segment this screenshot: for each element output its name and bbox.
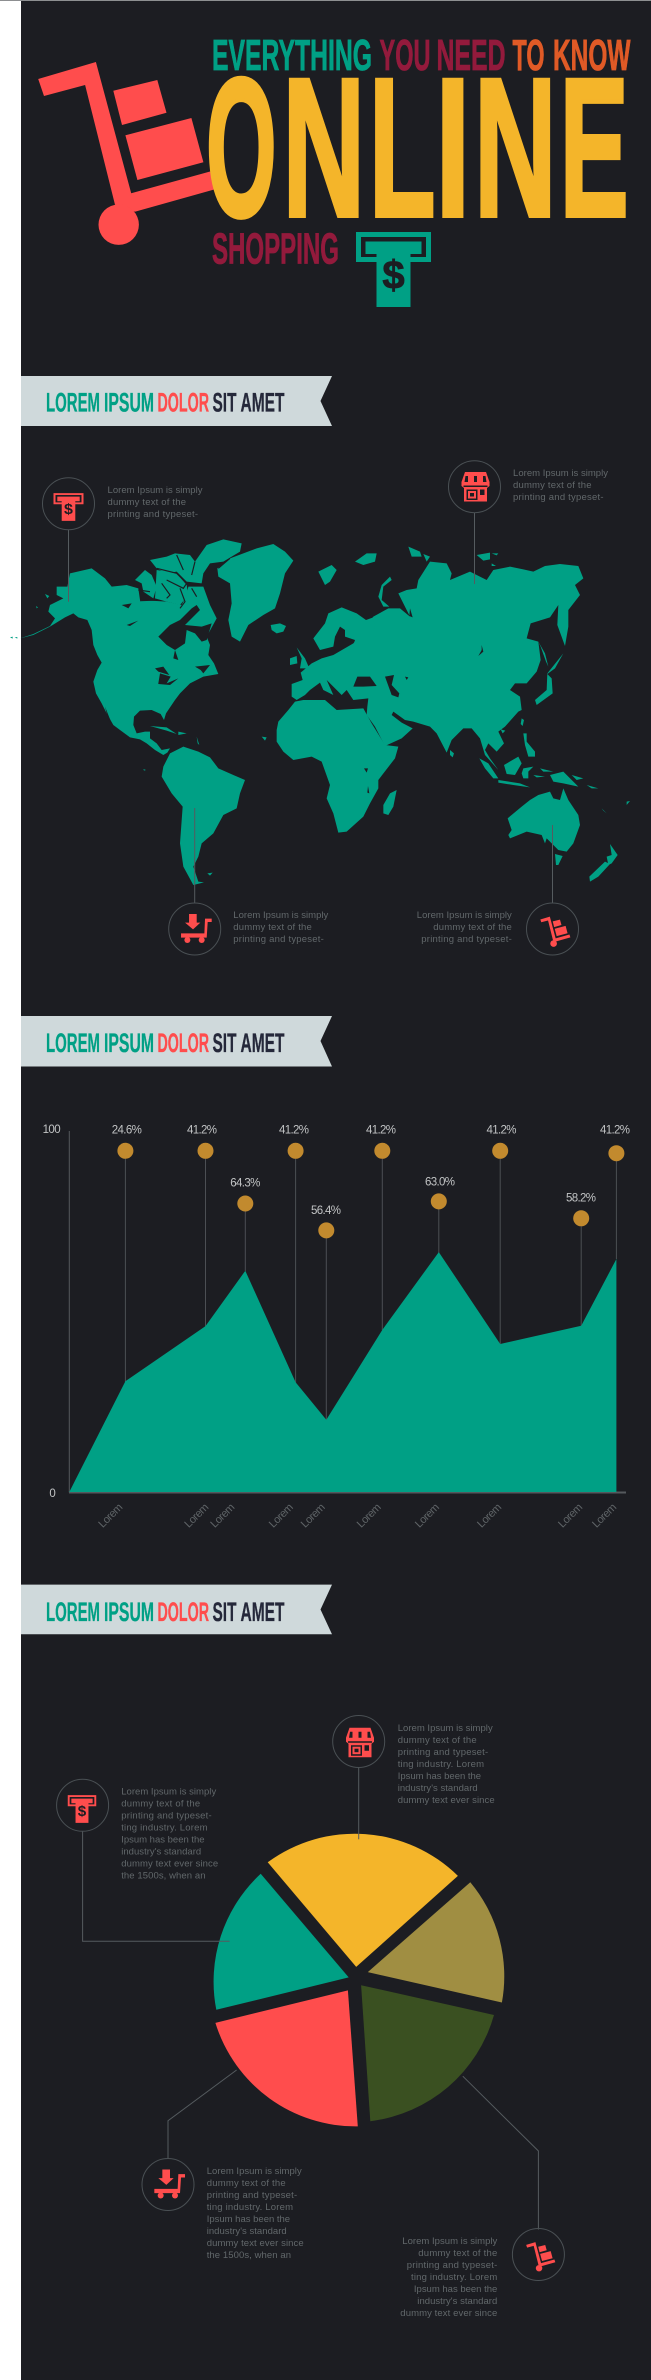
chart value labels: 63.0% xyxy=(425,1176,455,1188)
title: online: N xyxy=(474,37,557,258)
text block: ting industry. Lorem xyxy=(398,1759,484,1770)
callout: map top right xyxy=(448,461,608,584)
callout: map bottom right xyxy=(417,825,578,955)
map: southeast asia and oceania xyxy=(450,718,630,882)
text block: Lorem Ipsum is simply xyxy=(121,1787,216,1798)
title line: everything you need to know: TO xyxy=(512,31,544,80)
ribbon heading 1: SIT xyxy=(212,388,237,418)
ribbon heading 1 xyxy=(21,376,332,426)
ribbon heading 2: DOLOR xyxy=(158,1028,209,1058)
ribbon heading 1: LOREM xyxy=(46,388,100,418)
chart data points xyxy=(117,1143,624,1238)
ribbon heading 1: DOLOR xyxy=(158,388,209,418)
text block: dummy text of the xyxy=(108,497,186,508)
text block: Ipsum has been the xyxy=(121,1835,205,1846)
chart value labels: 56.4% xyxy=(311,1205,341,1217)
callout: pie hand truck xyxy=(400,2076,564,2319)
text block: Lorem Ipsum is simply xyxy=(402,2236,498,2247)
text block: Lorem Ipsum is simply xyxy=(417,910,512,921)
ribbon heading 3: LOREM xyxy=(46,1597,100,1627)
text block: the 1500s, when an xyxy=(207,2250,291,2261)
callout: pie cart xyxy=(142,2070,304,2261)
icon: atm: $ xyxy=(78,1803,87,1820)
title: online: I xyxy=(435,37,471,258)
icon: atm: $ xyxy=(64,502,73,518)
text block xyxy=(513,468,608,503)
icon: cart with down arrow xyxy=(154,2170,185,2198)
chart category labels: Lorem xyxy=(267,1501,296,1530)
chart category labels: Lorem xyxy=(556,1501,585,1530)
callout: map top left xyxy=(42,478,203,602)
chart category labels: Lorem xyxy=(208,1501,237,1530)
area chart xyxy=(43,1124,630,1530)
map: eurasia xyxy=(290,547,583,770)
title line: everything you need to know: YOU xyxy=(380,31,430,80)
text block: industry's standard xyxy=(398,1783,478,1794)
text block: dummy text of the xyxy=(433,922,512,933)
chart category labels xyxy=(96,1501,619,1530)
text block: printing and typeset- xyxy=(108,509,198,520)
icon: atm xyxy=(54,493,84,521)
title: online: L xyxy=(369,37,436,258)
text block: ting industry. Lorem xyxy=(411,2272,497,2283)
icon: large atm slot with dollar xyxy=(356,232,431,307)
chart value labels: 41.2% xyxy=(486,1124,516,1136)
map: africa and south america xyxy=(143,700,398,885)
text block: ting industry. Lorem xyxy=(207,2202,293,2213)
ribbon heading 1: AMET xyxy=(240,388,285,418)
text block: dummy text of the xyxy=(418,2248,497,2259)
ribbon heading 2: AMET xyxy=(240,1028,285,1058)
icon: hand truck xyxy=(540,917,570,947)
text block: printing and typeset- xyxy=(421,934,512,945)
text block: printing and typeset- xyxy=(398,1747,488,1758)
text block: dummy text ever since xyxy=(121,1859,218,1870)
world map xyxy=(10,539,630,885)
text block: printing and typeset- xyxy=(407,2260,497,2271)
callout: pie atm xyxy=(57,1779,230,1941)
title line: everything you need to know: NEED xyxy=(436,31,506,80)
text block xyxy=(398,1723,495,1806)
ribbon heading 3: DOLOR xyxy=(158,1597,209,1627)
icon: store xyxy=(462,472,490,502)
ribbon heading 3: IPSUM xyxy=(104,1597,154,1627)
text block: ting industry. Lorem xyxy=(121,1823,208,1834)
text block: printing and typeset- xyxy=(121,1811,212,1822)
header: title block xyxy=(38,31,631,307)
icon: store xyxy=(346,1728,374,1757)
ribbon heading 2 xyxy=(21,1016,332,1066)
chart area xyxy=(69,1252,616,1492)
callout: pie store xyxy=(333,1716,495,1839)
text block: industry's standard xyxy=(121,1847,201,1858)
ribbon heading 2: IPSUM xyxy=(104,1028,154,1058)
chart category labels: Lorem xyxy=(299,1501,328,1530)
chart value labels: 41.2% xyxy=(279,1124,309,1136)
chart category labels: Lorem xyxy=(413,1501,442,1530)
icon: large hand truck xyxy=(38,62,220,245)
text block xyxy=(121,1787,218,1882)
icon: hand truck xyxy=(526,2242,555,2271)
chart value labels: 64.3% xyxy=(230,1177,260,1189)
chart category labels: Lorem xyxy=(590,1501,619,1530)
chart value labels: 58.2% xyxy=(566,1192,596,1204)
text block: printing and typeset- xyxy=(233,934,324,945)
ribbon heading 3 xyxy=(21,1585,332,1634)
chart category labels: Lorem xyxy=(96,1501,125,1530)
ribbon heading 1: IPSUM xyxy=(104,388,154,418)
text block xyxy=(233,910,329,945)
text block xyxy=(207,2166,304,2261)
chart axis labels: 100 xyxy=(43,1124,61,1136)
text block: Ipsum has been the xyxy=(414,2284,497,2295)
text block: dummy text of the xyxy=(398,1735,477,1746)
chart leader lines xyxy=(125,1150,616,1420)
text block: dummy text ever since xyxy=(400,2308,497,2319)
map: north america and greenland xyxy=(10,539,293,755)
text block xyxy=(417,910,512,945)
title line: everything you need to know xyxy=(212,31,631,80)
text block: dummy text ever since xyxy=(207,2238,304,2249)
text block: Lorem Ipsum is simply xyxy=(513,468,608,479)
text block xyxy=(108,485,203,520)
ribbon heading 2: SIT xyxy=(212,1028,237,1058)
text block: dummy text of the xyxy=(513,480,592,491)
text block: industry's standard xyxy=(207,2226,287,2237)
callout: map bottom left xyxy=(169,808,329,955)
text block: Lorem Ipsum is simply xyxy=(108,485,203,496)
text block: Ipsum has been the xyxy=(207,2214,290,2225)
icon: atm xyxy=(68,1795,96,1823)
ribbon heading 2: LOREM xyxy=(46,1028,100,1058)
chart axis labels xyxy=(43,1124,61,1500)
chart axis labels: 0 xyxy=(49,1488,56,1500)
chart category labels: Lorem xyxy=(475,1501,504,1530)
text block: printing and typeset- xyxy=(513,492,604,503)
title line: shopping: SHOPPING xyxy=(212,224,339,274)
text block: dummy text of the xyxy=(121,1799,200,1810)
ribbon heading 3: AMET xyxy=(240,1597,285,1627)
text block: industry's standard xyxy=(417,2296,497,2307)
text block: Lorem Ipsum is simply xyxy=(398,1723,493,1734)
text block: dummy text of the xyxy=(207,2178,286,2189)
title: online: O xyxy=(206,37,277,258)
chart category labels: Lorem xyxy=(355,1501,384,1530)
icon: large atm slot with dollar: $ xyxy=(382,254,405,298)
chart value labels: 41.2% xyxy=(600,1124,630,1136)
chart category labels: Lorem xyxy=(182,1501,211,1530)
pie chart xyxy=(214,1834,504,2126)
text block: Lorem Ipsum is simply xyxy=(233,910,329,921)
chart value labels xyxy=(112,1124,630,1217)
text block: printing and typeset- xyxy=(207,2190,297,2201)
chart value labels: 41.2% xyxy=(187,1124,217,1136)
ribbon heading 3: SIT xyxy=(212,1597,237,1627)
text block: dummy text ever since xyxy=(398,1795,495,1806)
icon: cart with down arrow xyxy=(181,914,212,943)
chart value labels: 24.6% xyxy=(112,1124,142,1136)
title: online: N xyxy=(282,37,365,258)
text block: dummy text of the xyxy=(233,922,312,933)
text block: Lorem Ipsum is simply xyxy=(207,2166,302,2177)
chart value labels: 41.2% xyxy=(366,1124,396,1136)
title line: everything you need to know: EVERYTHING xyxy=(212,31,372,80)
text block: Ipsum has been the xyxy=(398,1771,481,1782)
text block: the 1500s, when an xyxy=(121,1871,206,1882)
chart axes xyxy=(69,1131,626,1492)
text block xyxy=(400,2236,498,2319)
